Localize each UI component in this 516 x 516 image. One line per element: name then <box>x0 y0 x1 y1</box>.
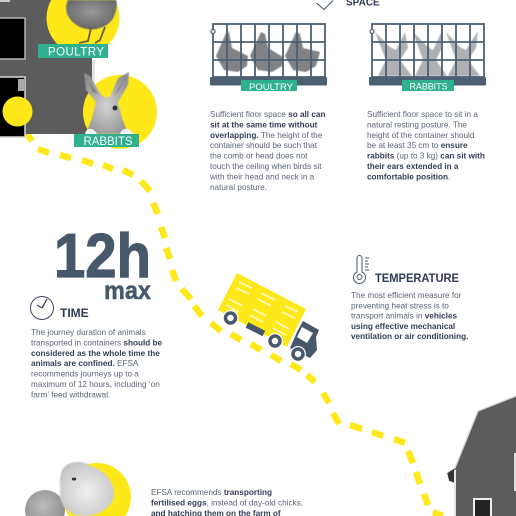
rabbit cage <box>369 24 486 92</box>
icon: thermometer <box>354 256 369 283</box>
text: poultry space: sit at the same time without <box>210 120 318 129</box>
poultry illustration <box>46 0 120 54</box>
label: rabbits: RABBITS <box>84 136 133 148</box>
text: time: farm’ feed withdrawal. <box>31 390 110 399</box>
text: poultry space: Sufficient floor space so all can <box>210 110 325 119</box>
text: rabbit space: their ears extended in a <box>367 162 459 171</box>
icon: space tag <box>316 0 333 10</box>
text: time: animals are confined. EFSA <box>31 359 138 368</box>
text: time: maximum of 12 hours, including ‘on <box>31 380 160 389</box>
text: poultry space: natural posture. <box>210 183 267 192</box>
text: eggs: EFSA recommends transporting <box>151 488 272 497</box>
text: temperature: preventing heat stress is to <box>351 301 449 310</box>
rabbits <box>375 31 480 76</box>
text: temperature: The most efficient measure for <box>351 291 462 300</box>
big number: 12h max: max <box>104 277 151 305</box>
text: rabbit space: Sufficient floor space to sit in a <box>367 110 478 119</box>
label: poultry: POULTRY <box>249 82 294 93</box>
text: poultry space: touch the ceiling when birds sit <box>210 162 322 171</box>
text: rabbit space: rabbits (up to 3 kg) can sit with <box>367 152 485 161</box>
text: poultry space: overlapping. The height of the <box>210 131 322 140</box>
chick and egg illustration <box>25 462 131 516</box>
poultry cage <box>210 24 327 93</box>
dashed road line <box>26 132 443 516</box>
chickens <box>216 32 320 72</box>
text: temperature: transport animals in vehicles <box>351 312 457 321</box>
text: time: The journey duration of animals <box>31 328 146 337</box>
heading: time: TIME <box>60 306 89 320</box>
text: time: transported in containers should be <box>31 338 162 347</box>
heading: temperature: TEMPERATURE <box>375 271 459 285</box>
truck <box>218 273 319 362</box>
label: poultry: POULTRY <box>48 46 104 58</box>
text: rabbit space: be at least 35 cm to ensure <box>367 141 468 150</box>
yellow dot on barn <box>2 96 32 126</box>
text: temperature: ventilation or air conditioning. <box>351 332 468 341</box>
text: eggs: fertilised eggs, instead of day-old chicks, <box>151 498 303 507</box>
rabbit illustration <box>83 72 157 149</box>
barn, top left <box>0 0 95 137</box>
label: rabbits: RABBITS <box>410 82 448 92</box>
big number: 12h max: 12h <box>54 222 151 291</box>
text: rabbit space: natural resting posture. The <box>367 120 467 129</box>
text: poultry space: the comb or head does not <box>210 152 308 161</box>
text: rabbit space: height of the container should <box>367 131 475 140</box>
text: time: recommends journeys up to a <box>31 370 139 379</box>
label: poultry <box>38 44 108 58</box>
text: poultry space: with their head and neck in a <box>209 172 315 181</box>
heading: space <box>316 0 380 10</box>
text: rabbit space: comfortable position. <box>367 172 450 181</box>
barn, bottom right <box>447 396 516 516</box>
text: time: considered as the whole time the <box>31 349 160 358</box>
text: temperature: using effective mechanical <box>351 322 455 331</box>
text: poultry space: container should be such that <box>210 141 318 150</box>
label: rabbits <box>74 134 139 148</box>
icon: clock <box>30 296 54 320</box>
slats <box>226 282 298 335</box>
